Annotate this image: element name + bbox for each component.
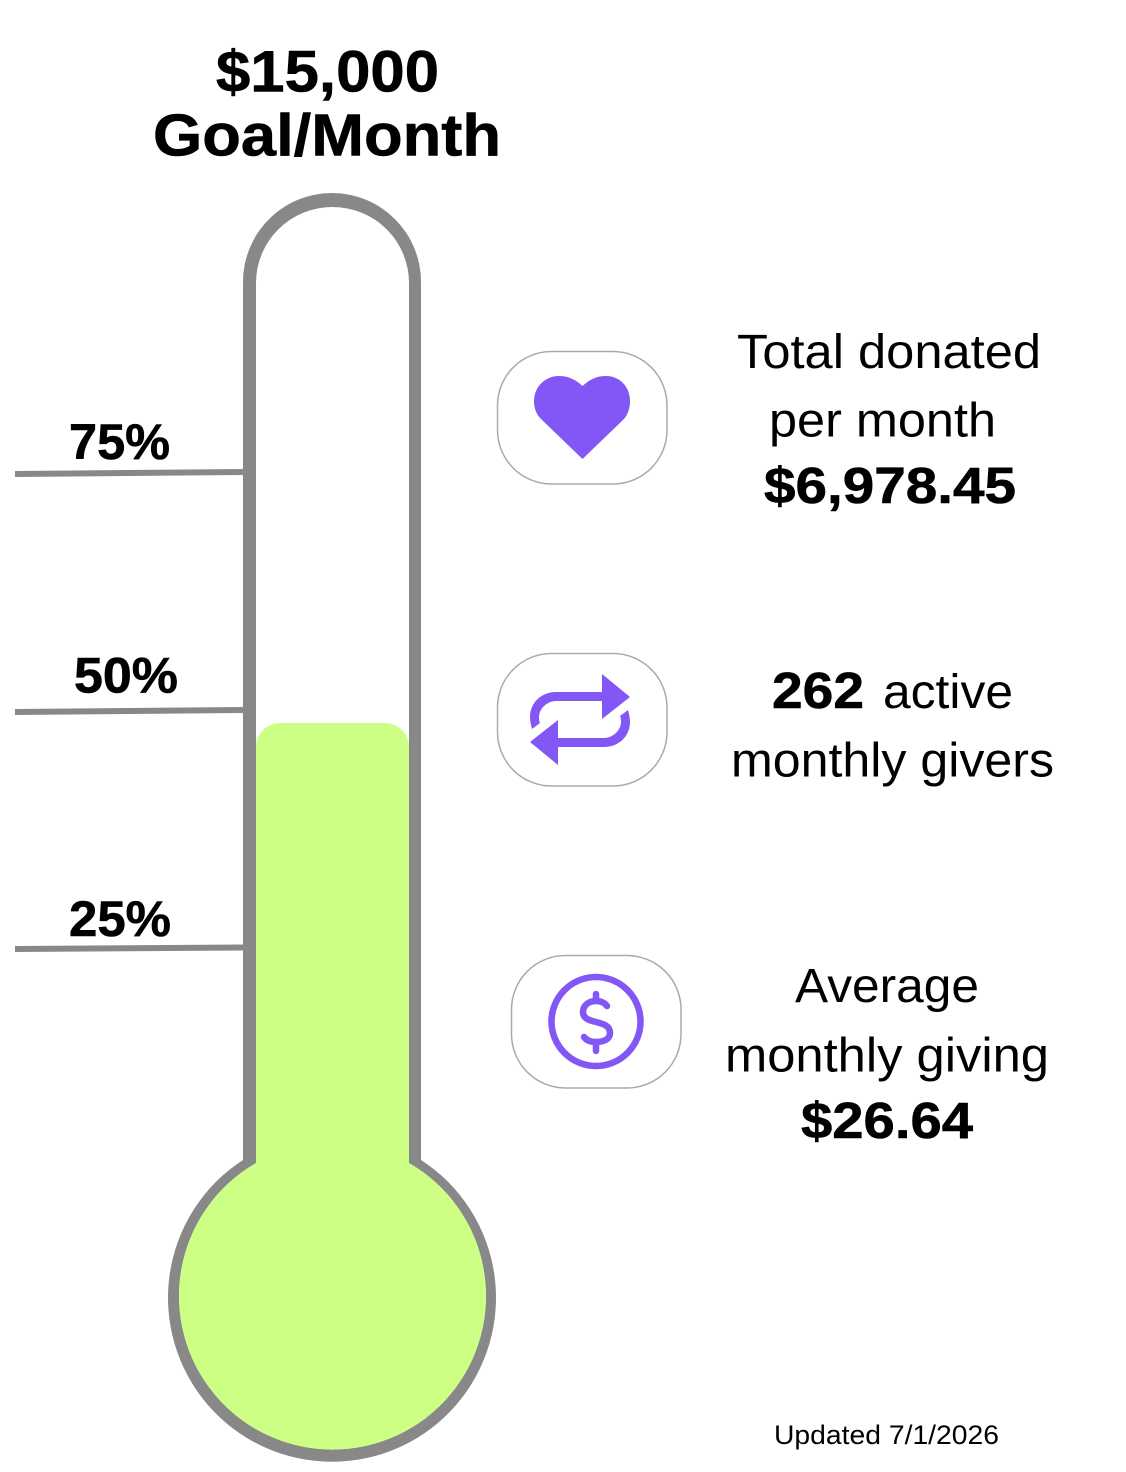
- stat: average monthly giving: [725, 960, 1049, 1149]
- marker: 25%: 25%: [69, 891, 171, 947]
- marker: 50%: [15, 648, 243, 715]
- stat: average monthly giving: Average: [795, 960, 979, 1013]
- icon: repeat arrows: [498, 654, 667, 786]
- thermometer fill level: [179, 723, 486, 1450]
- stat: active monthly givers: monthly givers: [731, 734, 1054, 788]
- stat: average monthly giving: monthly giving: [725, 1030, 1049, 1082]
- stat: total donated: $6,978.45: [764, 457, 1016, 514]
- stat: total donated: [737, 326, 1041, 514]
- stat: total donated: per month: [769, 394, 996, 448]
- thermometer interior: [179, 207, 486, 1450]
- marker: 75%: 75%: [69, 414, 170, 470]
- title: $15,000: [216, 40, 439, 104]
- stat: active monthly givers: active: [883, 666, 1013, 719]
- stat: average monthly giving: $26.64: [801, 1092, 974, 1149]
- marker: 50%: 50%: [74, 648, 178, 704]
- thermometer outline: [168, 193, 496, 1462]
- title: [153, 40, 501, 168]
- stat: active monthly givers: 262: [772, 662, 864, 719]
- marker: 25%: [15, 891, 243, 952]
- updated date: Updated 7/1/2026: [774, 1420, 999, 1450]
- stat: total donated: Total donated: [737, 326, 1041, 379]
- title: Goal/Month: [153, 102, 501, 168]
- icon: dollar coin: [512, 956, 681, 1088]
- icon: heart: [498, 352, 667, 484]
- stat: active monthly givers: [731, 662, 1054, 788]
- thermometer: [168, 193, 496, 1462]
- marker: 75%: [15, 414, 243, 477]
